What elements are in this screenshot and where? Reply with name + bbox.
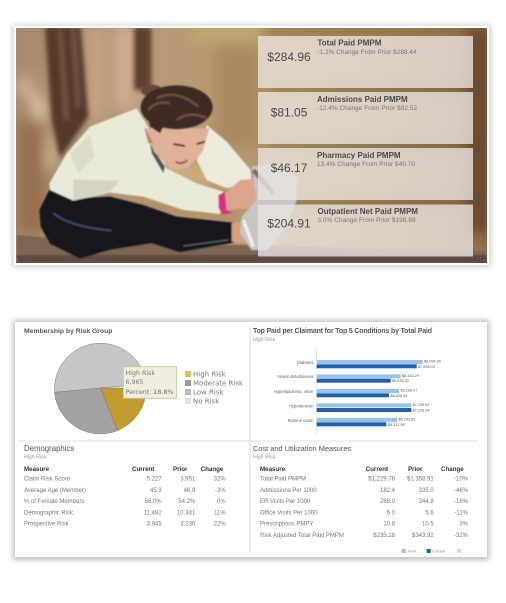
- cost table rows: -10%: [454, 477, 469, 483]
- heading: cost and utilization: Cost and Utilization Measures: [253, 444, 351, 453]
- chart legend: [402, 548, 461, 554]
- panel: demographics table: [24, 444, 226, 527]
- cost table rows: Risk Adjusted Total Paid PMPM: [260, 533, 344, 539]
- table rows: Claim Risk Score: [24, 477, 71, 483]
- cost table rows: ER Visits Per 1000: [260, 499, 311, 505]
- cost table rows: [260, 477, 469, 539]
- cost table header: Prior: [408, 466, 423, 473]
- tooltip: High Risk: [126, 370, 155, 377]
- bar chart: $5,311.99: [388, 423, 405, 427]
- running shoe: [240, 163, 297, 250]
- bar chart: $6,192.82: [398, 418, 415, 422]
- table rows: Average Age (Member): [24, 488, 86, 494]
- bar chart: Visual disturbances: [277, 374, 314, 379]
- KPI: outpatient net paid PMPM: 3.0% Change From Prior $198.89: [318, 217, 416, 224]
- pie chart: [54, 343, 146, 434]
- KPI: total paid PMPM: $284.96: [267, 50, 311, 64]
- bar chart: $7,239.62: [412, 403, 429, 407]
- chart legend: Current: [432, 548, 446, 554]
- bar chart: $6,433.29: [402, 374, 419, 378]
- bar chart: $5,528.98: [390, 394, 407, 398]
- table rows: 3.951: [180, 477, 196, 483]
- table rows: 45.3: [150, 488, 162, 494]
- wristband: [218, 192, 233, 215]
- hand: [224, 178, 257, 211]
- cost table rows: $343.92: [412, 533, 434, 539]
- table rows: Demographic Risk: [24, 510, 74, 516]
- table rows: 11%: [214, 510, 226, 516]
- hair: [141, 85, 162, 97]
- KPI: pharmacy paid PMPM: [258, 148, 473, 200]
- table rows: 3.945: [147, 521, 162, 527]
- cost table rows: 182.4: [380, 488, 396, 494]
- table header: Change: [201, 466, 224, 473]
- panel: top paid per claimant: [253, 328, 441, 435]
- KPI panels: [258, 36, 473, 256]
- bar chart: Hyperlipidemia, other: [274, 389, 314, 394]
- hero photo: woman stretching outdoors: [12, 25, 491, 267]
- pie legend: No Risk: [193, 398, 220, 406]
- cost table rows: -32%: [454, 533, 469, 539]
- table rows: 46.8: [184, 488, 196, 494]
- tooltip: Percent: 18.8%: [126, 389, 173, 396]
- cost table rows: -16%: [454, 499, 469, 505]
- KPI: pharmacy paid PMPM: 13.4% Change From Prior $40.70: [317, 161, 415, 168]
- KPI: outpatient net paid PMPM: [258, 204, 473, 256]
- bar chart: Diabetes: [297, 360, 314, 365]
- table rows: 54.2%: [178, 499, 196, 505]
- cost table rows: -11%: [454, 510, 469, 516]
- table rows: 5.227: [147, 477, 162, 483]
- heading: top paid per claimant: Top Paid per Claimant for Top 5 Conditions by Total Paid: [253, 328, 432, 335]
- heading: membership: Membership by Risk Group: [24, 328, 112, 335]
- cost table rows: Total Paid PMPM: [260, 477, 306, 483]
- subheading: demographics: High Risk: [24, 454, 47, 460]
- KPI: outpatient net paid PMPM: Outpatient Net Paid PMPM: [318, 207, 418, 216]
- cost table rows: 344.8: [419, 499, 434, 505]
- table header: [24, 466, 224, 473]
- table rows: 22%: [214, 521, 226, 527]
- bar chart: $8,094.30: [424, 360, 441, 364]
- KPI: pharmacy paid PMPM: Pharmacy Paid PMPM: [317, 151, 401, 160]
- KPI: total paid PMPM: -1.2% Change From Prior $288.44: [318, 49, 417, 56]
- cost table rows: $235.28: [373, 533, 396, 539]
- pie legend: [185, 370, 244, 406]
- cost table rows: 10.8: [383, 521, 396, 527]
- table header: Prior: [173, 466, 188, 473]
- cost table rows: -46%: [454, 488, 469, 494]
- cost table rows: Office Visits Per 1000: [260, 510, 318, 516]
- cost table rows: 335.0: [419, 488, 434, 494]
- cost table rows: Prescriptions PMPY: [260, 521, 313, 527]
- KPI: total paid PMPM: [258, 36, 473, 88]
- cost table rows: 5.6: [425, 510, 434, 516]
- bar chart: $7,233.59: [412, 408, 429, 412]
- cost table rows: Admissions Per 1000: [260, 488, 317, 494]
- KPI: outpatient net paid PMPM: $204.91: [267, 216, 311, 230]
- table rows: -3%: [215, 488, 226, 494]
- neck and face: [145, 128, 209, 170]
- cost table header: [260, 466, 464, 473]
- heading: demographics: Demographics: [24, 444, 74, 453]
- foot and ankle: [232, 222, 247, 243]
- table rows: Prospective Risk: [24, 521, 70, 527]
- table rows: 56.0%: [145, 499, 162, 505]
- bar chart: [274, 347, 441, 435]
- table rows: % of Female Members: [24, 499, 84, 505]
- back arm: [197, 125, 252, 188]
- table rows: 10.341: [177, 510, 196, 516]
- chart legend: Prior: [408, 548, 417, 554]
- cost table header: Measure: [260, 466, 286, 473]
- cost table rows: 5.0: [387, 510, 396, 516]
- cost table rows: 10.5: [422, 521, 434, 527]
- panel: cost and utilization table: [253, 444, 469, 554]
- leggings: [39, 188, 234, 259]
- subheading: top paid: High Risk: [253, 337, 276, 343]
- cost table rows: $1,229.76: [368, 477, 396, 483]
- KPI: admissions paid PMPM: Admissions Paid PMPM: [317, 95, 408, 104]
- table rows: 3.236: [180, 521, 196, 527]
- bar chart: $5,639.22: [392, 379, 409, 383]
- KPI: admissions paid PMPM: -12.4% Change From Prior $92.52: [317, 105, 417, 112]
- bar chart: Hypertension: [289, 403, 314, 408]
- table rows: 11.482: [144, 510, 162, 516]
- tooltip: [123, 367, 177, 398]
- pie legend: High Risk: [193, 370, 227, 378]
- cost table header: Current: [366, 466, 388, 473]
- cost table rows: 3%: [459, 521, 469, 527]
- cost table header: Change: [441, 466, 464, 473]
- KPI: total paid PMPM: Total Paid PMPM: [318, 38, 382, 48]
- log: [16, 234, 487, 256]
- table rows: 32%: [214, 477, 226, 483]
- KPI: admissions paid PMPM: [258, 92, 473, 144]
- bar chart: Routine exam: [288, 418, 314, 423]
- table header: Measure: [24, 466, 50, 473]
- panel: membership by risk group: [24, 328, 244, 434]
- bar chart: $6,286.67: [400, 388, 417, 392]
- cost table rows: 288.0: [380, 499, 396, 505]
- cost table rows: $1,358.91: [407, 477, 434, 483]
- pie legend: Low Risk: [193, 388, 224, 396]
- tooltip: 6,965: [126, 379, 144, 386]
- jacket: [49, 108, 223, 214]
- dashboard card: [13, 320, 489, 560]
- table rows: [24, 477, 226, 527]
- bar chart: $7,668.03: [418, 365, 435, 369]
- table rows: 0%: [217, 499, 226, 505]
- pie legend: Moderate Risk: [193, 380, 244, 388]
- KPI: admissions paid PMPM: $81.05: [271, 106, 308, 120]
- table header: Current: [132, 466, 154, 473]
- subheading: cost: High Risk: [253, 454, 276, 460]
- KPI: pharmacy paid PMPM: $46.17: [271, 161, 308, 175]
